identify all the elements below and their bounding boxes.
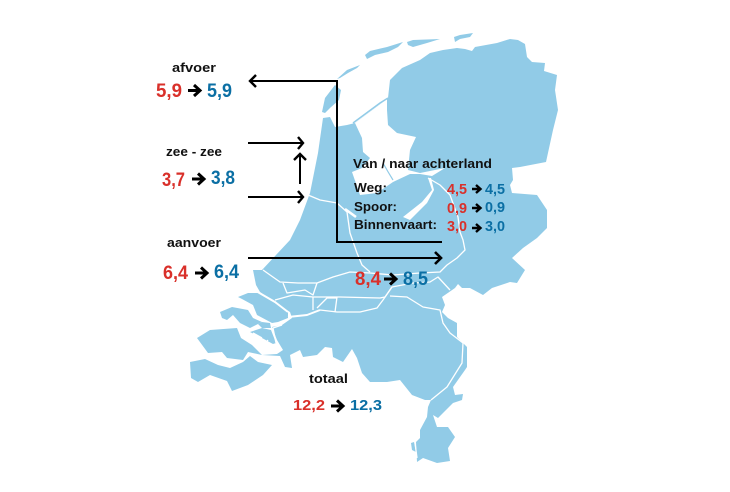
block: totaal: 12,3 bbox=[350, 397, 382, 414]
Voeren sliver bbox=[411, 442, 416, 452]
map of the Netherlands bbox=[190, 33, 558, 463]
IJsselmeer water bbox=[352, 99, 445, 195]
block: afvoer: afvoer bbox=[172, 60, 216, 75]
block: afvoer bbox=[156, 60, 232, 102]
block: aanvoer: 6,4 bbox=[214, 262, 239, 283]
row: spoor bbox=[447, 199, 505, 217]
block: overslag bbox=[355, 269, 428, 290]
Texel bbox=[322, 85, 341, 113]
block: van / naar achterland: Weg: bbox=[354, 180, 387, 195]
block: aanvoer bbox=[163, 235, 239, 284]
row: binnenvaart bbox=[447, 218, 505, 235]
arrow: zee-zee bottom bbox=[248, 191, 303, 203]
block: overslag: 8,4 bbox=[355, 269, 381, 290]
block: afvoer: 5,9 bbox=[207, 81, 232, 102]
mainland silhouette bbox=[197, 39, 558, 463]
row: binnenvaart: 3,0 bbox=[447, 218, 467, 235]
Tholen bbox=[258, 322, 271, 328]
block: van / naar achterland: Van / naar achterland bbox=[353, 156, 492, 171]
Ameland bbox=[407, 39, 440, 47]
block: zee-zee: 3,7 bbox=[162, 170, 185, 191]
row: weg: 4,5 bbox=[485, 181, 505, 198]
row: weg bbox=[447, 181, 505, 198]
Schiermonnikoog bbox=[454, 33, 473, 42]
Schouwen-Duiveland bbox=[220, 307, 262, 328]
row: spoor: 0,9 bbox=[485, 199, 505, 216]
row: binnenvaart: 3,0 bbox=[485, 218, 505, 235]
block: zee-zee: zee - zee bbox=[166, 144, 222, 159]
block: totaal: 12,2 bbox=[293, 397, 325, 414]
row: spoor: 0,9 bbox=[447, 200, 467, 217]
Houtribdijk bbox=[383, 163, 393, 180]
block: totaal: totaal bbox=[309, 371, 348, 386]
block: aanvoer: 6,4 bbox=[163, 263, 188, 284]
block: totaal bbox=[293, 371, 382, 414]
arrow: aanvoer flow bbox=[248, 252, 441, 264]
row: weg: 4,5 bbox=[447, 181, 467, 198]
block: afvoer: 5,9 bbox=[156, 81, 182, 102]
Terschelling bbox=[365, 42, 403, 59]
arrow: zee-zee top bbox=[248, 137, 303, 149]
block: van / naar achterland: Spoor: bbox=[354, 199, 397, 214]
block: aanvoer: aanvoer bbox=[167, 235, 221, 250]
block: van / naar achterland bbox=[353, 156, 505, 235]
block: zee-zee: 3,8 bbox=[211, 168, 235, 189]
Noord-Beveland bbox=[250, 328, 276, 344]
arrow: zee-zee up bbox=[294, 154, 306, 184]
Veluwemeer bbox=[403, 178, 434, 220]
Goeree-Overflakkee bbox=[238, 293, 288, 323]
Afsluitdijk bbox=[353, 98, 388, 123]
Zeeuws-Vlaanderen bbox=[190, 356, 272, 391]
arrow: afvoer flow bbox=[250, 75, 442, 242]
rivers and borders bbox=[253, 178, 465, 458]
block: overslag: 8,5 bbox=[403, 269, 428, 290]
block: zee-zee bbox=[162, 144, 235, 191]
block: van / naar achterland: Binnenvaart: bbox=[354, 217, 437, 232]
Vlieland bbox=[337, 65, 360, 79]
